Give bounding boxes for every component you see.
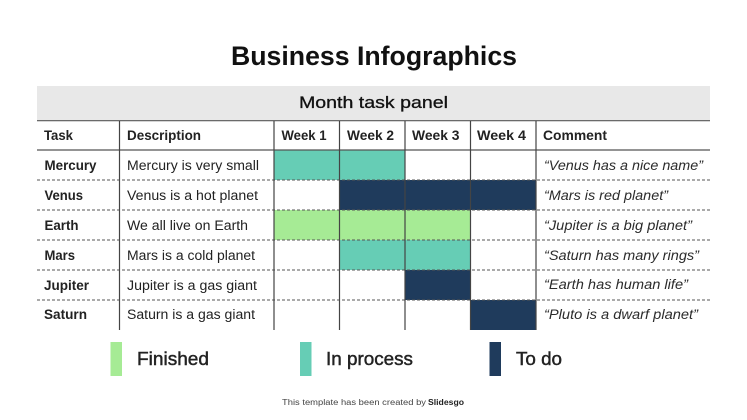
descriptions: Mercury is very small xyxy=(127,158,259,173)
legend: in process: In process xyxy=(326,348,413,369)
comments: “Saturn has many rings” xyxy=(544,248,700,263)
table heading band: Month task panel xyxy=(299,93,448,112)
comments: “Mars is red planet” xyxy=(544,188,669,203)
task names xyxy=(44,158,97,322)
column headers: Week 3 xyxy=(412,128,460,143)
descriptions: Venus is a hot planet xyxy=(127,188,258,203)
descriptions: Saturn is a gas giant xyxy=(127,307,255,322)
comments: “Jupiter is a big planet” xyxy=(544,218,693,233)
footer credit: This template has been created by xyxy=(282,398,426,407)
task names: Mars xyxy=(44,248,75,263)
panel: month task table xyxy=(37,86,710,330)
legend: to do: To do xyxy=(516,348,562,369)
comments: “Earth has human life” xyxy=(544,277,689,292)
column headers: Comment xyxy=(543,128,608,143)
legend: finished xyxy=(110,342,209,376)
footer credit: Slidesgo xyxy=(428,398,464,407)
legend: to do xyxy=(490,342,562,376)
descriptions: Mars is a cold planet xyxy=(127,248,255,263)
column headers: Task xyxy=(44,128,73,143)
descriptions: We all live on Earth xyxy=(127,218,248,233)
column headers: Week 2 xyxy=(347,128,394,143)
comments: “Pluto is a dwarf planet” xyxy=(544,307,699,322)
task names: Earth xyxy=(44,218,78,233)
comments: “Venus has a nice name” xyxy=(544,158,704,173)
comments xyxy=(544,158,704,322)
legend: finished: Finished xyxy=(137,348,209,369)
column headers: Week 1 xyxy=(282,128,327,143)
descriptions: Jupiter is a gas giant xyxy=(127,278,257,293)
table heading band xyxy=(37,86,710,120)
descriptions xyxy=(127,158,259,322)
column headers: Week 4 xyxy=(477,128,527,143)
title: Business Infographics xyxy=(231,41,517,71)
task names: Venus xyxy=(44,188,83,203)
task names: Jupiter xyxy=(44,278,90,293)
column headers xyxy=(44,128,608,143)
task names: Saturn xyxy=(44,307,87,322)
task names: Mercury xyxy=(44,158,97,173)
legend xyxy=(110,342,562,376)
column headers: Description xyxy=(127,128,201,143)
gantt bars xyxy=(274,150,536,330)
legend: in process xyxy=(300,342,413,376)
footer credit xyxy=(282,398,464,407)
